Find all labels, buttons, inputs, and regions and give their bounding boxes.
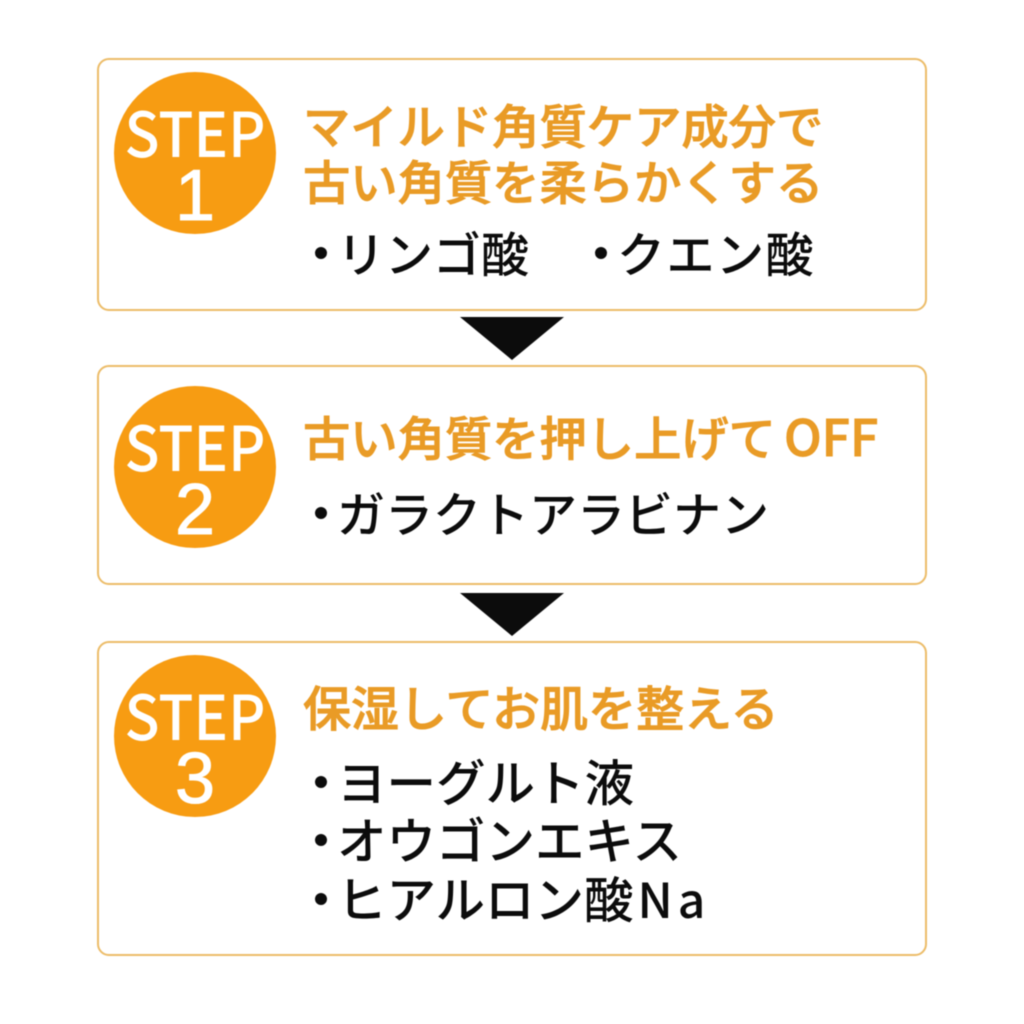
heading: step 2: 古い角質を押し上げてOFF bbox=[303, 399, 878, 471]
panel: step 2 bbox=[97, 365, 927, 585]
icon: step 1 badge: STEP bbox=[125, 85, 265, 175]
icon: step 2 badge bbox=[114, 386, 276, 548]
heading: step 1: マイルド角質ケア成分で bbox=[303, 89, 823, 158]
icon: step 3 badge: STEP bbox=[125, 668, 265, 758]
heading: step 1: 古い角質を柔らかくする bbox=[303, 145, 823, 214]
text: step 2 ingredients: ガラクトアラビナン bbox=[337, 476, 769, 546]
icon: step 1 badge bbox=[114, 72, 276, 234]
arrow: step 1 to 2 bbox=[460, 317, 564, 360]
text: step 3 ingredients: ヨーグルト液 bbox=[337, 745, 634, 816]
text: step 3 ingredients: オウゴンエキス bbox=[337, 803, 682, 874]
text: step 3 ingredients: ヒアルロン酸Na bbox=[337, 862, 710, 933]
arrow: step 2 to 3 bbox=[460, 593, 564, 636]
text: step 3 ingredients bbox=[314, 745, 710, 933]
icon: step 2 badge: STEP bbox=[125, 399, 265, 489]
text: step 1 ingredients: リンゴ酸 クエン酸 bbox=[337, 216, 815, 286]
heading: step 1 bbox=[303, 89, 823, 214]
heading: step 3: 保湿してお肌を整える bbox=[303, 670, 779, 740]
icon: step 3 badge bbox=[114, 655, 276, 817]
panel: step 1 bbox=[97, 58, 927, 311]
icon: step 3 badge: 3 bbox=[175, 739, 215, 819]
icon: step 1 badge: 1 bbox=[175, 156, 215, 236]
icon: step 2 badge: 2 bbox=[175, 470, 215, 550]
panel: step 3 bbox=[97, 641, 927, 956]
